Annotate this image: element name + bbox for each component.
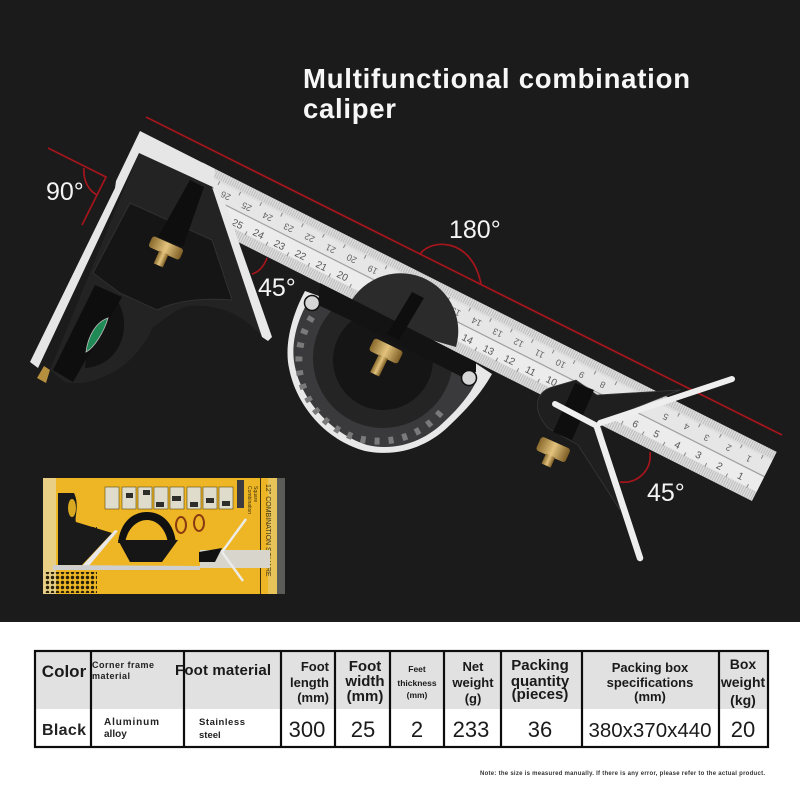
mini square head (58, 493, 112, 565)
ruler lower centimetre numbers: 10 (544, 374, 559, 389)
mini protractor arch (118, 512, 176, 543)
ruler lower centimetre numbers: 24 (251, 227, 266, 242)
ruler lower centimetre numbers: 11 (523, 365, 538, 379)
light lower panel (268, 478, 279, 594)
ruler lower centimetre numbers: 21 (314, 259, 329, 274)
mini protractor bar (118, 540, 178, 562)
frame window (93, 203, 232, 310)
brass nut (360, 338, 403, 381)
head brass nut (531, 436, 571, 472)
label: 180 degrees: 180° (449, 216, 501, 244)
brass end pin (37, 366, 50, 383)
red angle marker: right 45 degrees (620, 452, 650, 482)
specification table (35, 651, 768, 747)
ruler lower centimetre numbers: 1 (735, 471, 745, 483)
ruler lower centimetre numbers (230, 217, 745, 483)
header: packing quantity: Packing (511, 657, 569, 674)
level opening (85, 302, 124, 368)
mini ruler end (200, 550, 270, 568)
protractor scale marks (299, 317, 446, 441)
ruler body (178, 163, 777, 501)
mini ruler (53, 565, 200, 570)
ruler upper inch numbers: 15 (449, 305, 462, 318)
ruler graduation ticks (180, 166, 775, 497)
ruler lower centimetre numbers: 5 (651, 429, 661, 441)
ruler upper inch numbers: 13 (491, 326, 504, 339)
protractor opening (333, 310, 433, 410)
black cast frame (50, 153, 264, 383)
thumbnail tool marks (126, 490, 230, 507)
ruler upper inch numbers: 23 (282, 221, 295, 234)
label: right 45 degrees: 45° (647, 479, 685, 507)
halftone dots upper left (60, 527, 97, 551)
protractor scale ring (293, 300, 476, 447)
red angle marker: left 45 degrees (252, 258, 267, 274)
white arms (555, 379, 732, 558)
ruler upper inch numbers: 22 (303, 231, 316, 244)
ruler upper inch numbers (219, 189, 753, 464)
ruler upper inch numbers: 18 (386, 273, 399, 286)
value: stainless steel (199, 717, 245, 741)
value: foot width: 25 (351, 717, 375, 742)
square head (30, 131, 272, 383)
header: foot width: width (344, 673, 385, 690)
header: net weight (451, 659, 494, 706)
header: feet thickness (397, 664, 437, 700)
ruler upper inch numbers: 20 (345, 252, 358, 265)
header: packing quantity: quantity (511, 673, 570, 690)
header band (35, 651, 768, 709)
measurement note: Note: the size is measured manually. If there is any error, please refer to the actual product. (480, 771, 765, 777)
silver stock edge (30, 131, 215, 368)
ruler upper inch numbers: 8 (598, 379, 607, 390)
ruler upper inch numbers: 24 (261, 210, 274, 223)
header: net weight: Net (463, 659, 484, 674)
white specification section (0, 622, 800, 800)
title: caliper (303, 93, 396, 124)
header: net weight: (g) (465, 691, 481, 706)
value: box weight: 20 (731, 717, 755, 742)
lock knob shaft (387, 292, 424, 340)
grey card edge (277, 478, 285, 594)
package side text: Combination (246, 486, 252, 514)
value: packing quantity: 36 (528, 717, 552, 742)
ruler lower centimetre numbers: 12 (502, 353, 517, 368)
title: Multifunctional combination (303, 63, 690, 94)
ruler lower centimetre numbers: 23 (272, 238, 287, 253)
value: aluminum alloy: Aluminum (104, 717, 159, 728)
header: foot length: Foot (301, 659, 330, 674)
ruler upper inch numbers: 12 (512, 336, 525, 349)
label: left 45 degrees: 45° (258, 274, 296, 302)
value: stainless steel: steel (199, 730, 221, 741)
ruler lower centimetre numbers: 4 (672, 440, 682, 452)
ruler upper inch numbers: 21 (324, 242, 337, 255)
value: black: Black (42, 722, 86, 739)
usage thumbnails (105, 487, 233, 509)
protractor head (287, 288, 492, 453)
mini centre arms (222, 519, 246, 581)
steel ruler (178, 163, 777, 501)
dark product background (0, 0, 800, 622)
pale left edge (43, 478, 56, 594)
header: corner frame material (92, 660, 154, 681)
header: foot width: Foot (349, 658, 381, 675)
value: foot length: 300 (289, 717, 325, 742)
header: net weight: weight (451, 675, 494, 690)
title (303, 63, 690, 124)
header: box weight: weight (720, 674, 765, 690)
ruler upper inch numbers: 16 (428, 294, 441, 307)
square lock knob shaft (158, 180, 204, 247)
header: feet thickness: (mm) (407, 690, 428, 700)
header: packing quantity (511, 657, 570, 703)
header: box weight: (kg) (730, 692, 756, 708)
dark side tag (237, 480, 244, 508)
header: corner frame material: material (92, 671, 130, 681)
ruler upper inch numbers: 5 (661, 411, 670, 422)
package side text: 12" COMBINATION SQUARE (264, 484, 271, 577)
header: foot width: (mm) (347, 688, 383, 705)
silver 45 degree blade (212, 187, 272, 341)
ruler upper inch numbers: 19 (366, 263, 379, 276)
value: feet thickness: 2 (411, 717, 423, 742)
protractor inner ring (313, 288, 453, 428)
value: stainless steel: Stainless (199, 717, 245, 728)
mini blade (82, 530, 118, 567)
header: packing box specifications: Packing box (612, 660, 689, 675)
ruler upper inch numbers: 3 (702, 432, 711, 443)
ruler upper inch numbers: 2 (724, 442, 733, 453)
header: packing quantity: (pieces) (512, 686, 568, 703)
header: feet thickness: thickness (397, 678, 437, 688)
ruler upper inch numbers: 25 (240, 200, 253, 213)
value: net weight: 233 (453, 717, 489, 742)
black body (537, 380, 680, 510)
header: corner frame material: Corner frame (92, 660, 154, 670)
ruler upper inch numbers: 10 (554, 357, 567, 370)
package side text: Square (252, 486, 258, 502)
ruler lower centimetre numbers: 22 (293, 248, 308, 263)
ruler lower centimetre numbers: 6 (630, 419, 640, 431)
spine divider line (260, 478, 261, 594)
ruler lower centimetre numbers: 3 (693, 450, 703, 462)
value: aluminum alloy: alloy (104, 729, 127, 740)
retail package photo (43, 478, 285, 594)
header: packing box specifications (607, 660, 693, 704)
ruler upper inch numbers: 14 (470, 315, 483, 328)
header: feet thickness: Feet (408, 664, 426, 674)
half disc (345, 273, 458, 347)
ruler upper inch numbers: 9 (577, 369, 586, 380)
table grid (35, 651, 768, 747)
ruler upper inch numbers: 11 (533, 347, 546, 360)
ruler upper inch numbers: 4 (682, 421, 691, 432)
left pivot screw (304, 296, 320, 310)
mini level hole (68, 499, 76, 517)
yellow card (43, 478, 285, 594)
header: foot material: Foot material (175, 662, 271, 679)
halftone dots lower left (45, 572, 97, 593)
header: packing box specifications: (mm) (634, 689, 666, 704)
ruler lower centimetre numbers: 13 (481, 343, 496, 358)
value: box specifications: 380x370x440 (588, 719, 712, 742)
ruler upper inch numbers: 1 (744, 453, 753, 464)
header: foot length: (mm) (297, 690, 329, 705)
ruler upper inch numbers: 26 (219, 189, 232, 202)
header: box weight (720, 656, 765, 708)
square brass nut (143, 236, 184, 272)
red angle marker: 90 degrees (48, 148, 106, 225)
mini centre head (199, 548, 222, 562)
green spirit vial (86, 318, 108, 352)
ruler lower centimetre numbers: 14 (460, 332, 475, 347)
ruler lower centimetre numbers: 20 (335, 269, 350, 284)
head knob shaft (553, 383, 594, 440)
two badge stamps (176, 515, 204, 533)
protractor silver rim (287, 291, 492, 453)
red angle guide: 180 degree line (146, 117, 782, 435)
sliding centre head (531, 379, 732, 558)
ruler lower centimetre numbers: 2 (714, 461, 724, 473)
header: foot length: length (290, 675, 329, 690)
protractor upper assembly (304, 273, 476, 386)
ruler lower centimetre numbers: 25 (230, 217, 245, 232)
cross bar (318, 283, 476, 377)
right pivot screw (462, 370, 476, 386)
header: box weight: Box (730, 656, 756, 672)
header: foot width (344, 658, 385, 705)
package side text (246, 484, 271, 577)
value: aluminum alloy (104, 717, 159, 740)
header: color: Color (42, 662, 87, 681)
header: packing box specifications: specifications (607, 675, 693, 690)
label: 90 degrees: 90° (46, 178, 84, 206)
header: foot length (290, 659, 330, 705)
level cylinder (53, 285, 122, 382)
